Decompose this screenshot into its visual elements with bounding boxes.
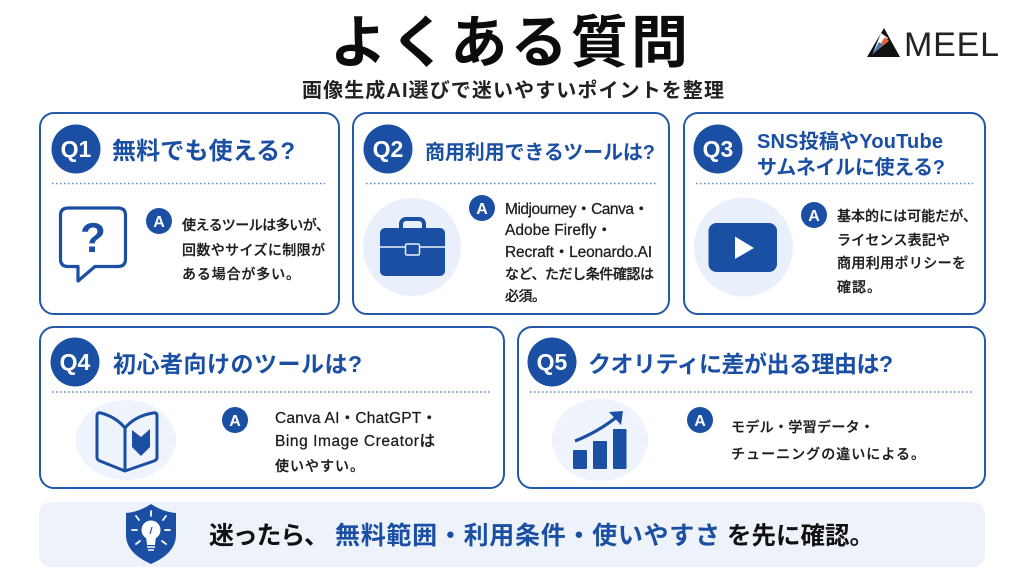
Q4 badge: Q4 bbox=[60, 349, 91, 375]
Q3 badge bbox=[694, 124, 742, 174]
summary text: 迷ったら、 bbox=[209, 522, 329, 550]
Q4 answer badge bbox=[222, 407, 248, 433]
Q5 answer text: チューニングの違いによる。 bbox=[731, 446, 925, 462]
Q2 answer text: Adobe Firefly・ bbox=[505, 222, 612, 239]
icon: question speech bubble: ? bbox=[80, 214, 106, 261]
Q1 answer text: 回数やサイズに制限が bbox=[182, 242, 325, 258]
Q1 badge bbox=[52, 124, 100, 174]
Q3 answer text: 商用利用ポリシーを bbox=[837, 255, 966, 271]
Q1 answer text: ある場合が多い。 bbox=[182, 266, 300, 282]
Q2 answer text: 必須。 bbox=[505, 288, 546, 304]
Q3 badge: Q3 bbox=[703, 136, 733, 162]
Q2 answer text: Midjourney・Canva・ bbox=[505, 201, 649, 218]
Q3 answer text: ライセンス表記や bbox=[837, 232, 950, 248]
Q3 answer text: 基本的には可能だが、 bbox=[837, 208, 977, 224]
Q3 heading: サムネイルに使える? bbox=[757, 156, 945, 179]
panel: bottom summary banner bbox=[39, 502, 985, 567]
Q2 heading: 商用利用できるツールは? bbox=[425, 141, 655, 164]
icon: video play bbox=[694, 198, 793, 296]
Q5 answer text bbox=[731, 419, 925, 462]
Q4 answer text: Bing Image Creatorは bbox=[275, 433, 435, 450]
panel: Q2 bbox=[353, 113, 669, 314]
Q3 answer text bbox=[837, 208, 977, 295]
Q1 answer text: 使えるツールは多いが、 bbox=[182, 217, 330, 233]
Q3 answer text: 確認。 bbox=[837, 279, 881, 295]
Q2 answer text: など、ただし条件確認は bbox=[505, 266, 654, 282]
panel: Q3 bbox=[684, 113, 985, 314]
Q3 answer badge bbox=[801, 202, 827, 228]
subtitle: 画像生成AI選びで迷いやすいポイントを整理 bbox=[302, 78, 724, 102]
Q2 badge bbox=[364, 124, 412, 174]
Q4 answer text: 使いやすい。 bbox=[275, 458, 364, 474]
Q3 heading bbox=[757, 130, 945, 179]
title: よくある質問 bbox=[330, 11, 688, 75]
Q3 heading: SNS投稿やYouTube bbox=[757, 130, 943, 153]
Q4 heading: 初心者向けのツールは? bbox=[113, 351, 362, 377]
icon: briefcase bbox=[363, 198, 461, 296]
summary text: を先に確認。 bbox=[727, 522, 874, 550]
Q2 answer text: Recraft・Leonardo.AI bbox=[505, 244, 652, 261]
Q2 badge: Q2 bbox=[373, 136, 403, 162]
summary text bbox=[209, 522, 874, 550]
Q4 answer text: Canva AI・ChatGPT・ bbox=[275, 410, 437, 427]
Q1 answer badge: A bbox=[153, 214, 165, 231]
Q5 badge: Q5 bbox=[537, 349, 568, 375]
panel: Q1 bbox=[40, 113, 339, 314]
Q1 badge: Q1 bbox=[61, 136, 92, 162]
panel: Q4 bbox=[40, 327, 504, 488]
logo: MEEL: MEEL bbox=[904, 26, 999, 64]
Q5 answer badge bbox=[687, 407, 713, 433]
Q5 badge bbox=[528, 338, 576, 386]
Q2 answer badge: A bbox=[476, 201, 488, 218]
Q5 answer text: モデル・学習データ・ bbox=[731, 419, 874, 435]
Q1 answer text bbox=[182, 217, 330, 282]
Q1 answer badge bbox=[146, 208, 172, 234]
icon: open book with beginner mark bbox=[76, 400, 176, 480]
Q4 answer badge: A bbox=[229, 413, 241, 430]
icon: question speech bubble bbox=[60, 208, 126, 281]
Q3 answer badge: A bbox=[808, 208, 820, 225]
icon: rising bar chart bbox=[552, 399, 648, 481]
Q5 heading: クオリティに差が出る理由は? bbox=[588, 351, 893, 377]
summary text: 無料範囲・利用条件・使いやすさ bbox=[335, 522, 720, 550]
Q4 badge bbox=[50, 338, 100, 386]
Q1 heading: 無料でも使える? bbox=[112, 138, 295, 165]
Q2 answer badge bbox=[469, 195, 495, 221]
Q5 answer badge: A bbox=[694, 413, 706, 430]
Q4 answer text bbox=[275, 410, 437, 474]
panel: Q5 bbox=[518, 327, 985, 488]
icon: shield with light bulb bbox=[126, 504, 176, 564]
Q2 answer text bbox=[505, 201, 654, 304]
